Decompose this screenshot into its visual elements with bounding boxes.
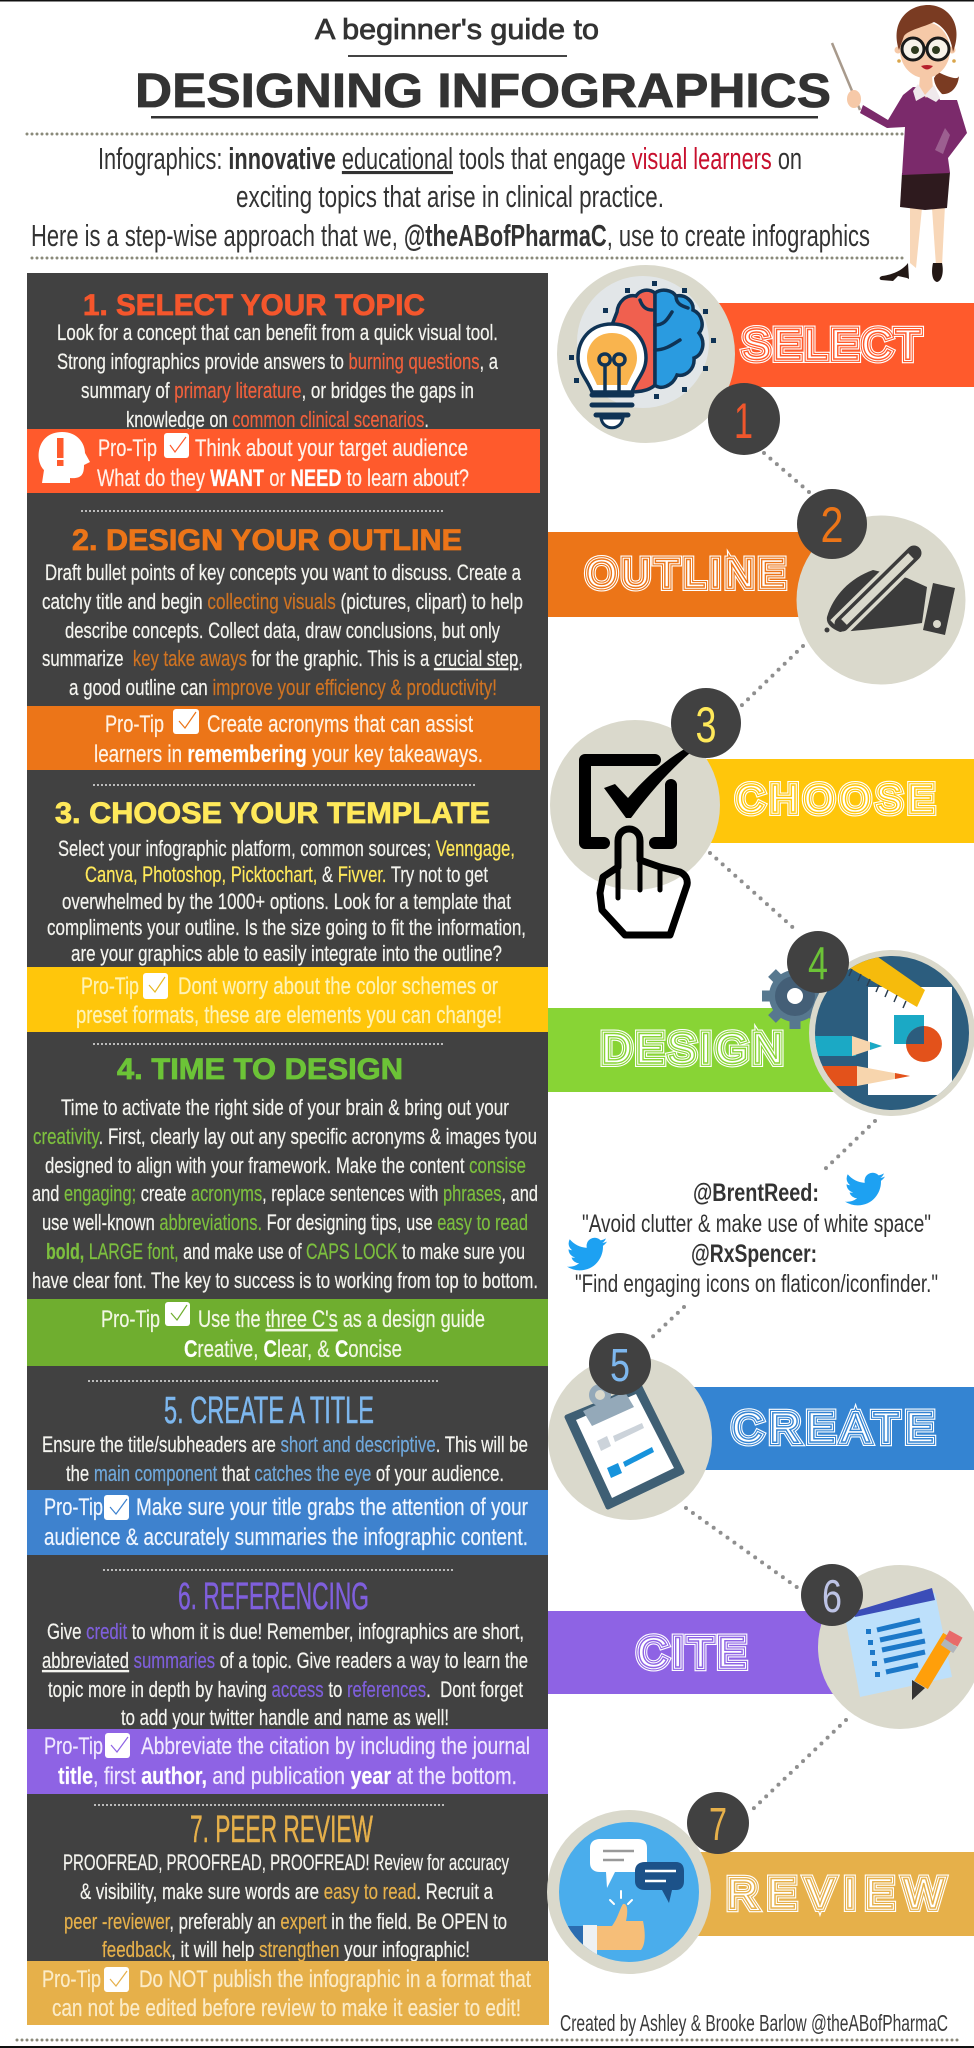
heading: 2. DESIGN YOUR OUTLINE xyxy=(72,524,462,557)
banner: outline: OUTLINE xyxy=(586,552,785,596)
intro text: Infographics: innovative educational tools that engage visual learners on xyxy=(98,141,802,176)
main title: DESIGNING INFOGRAPHICS xyxy=(135,65,831,118)
body text: compliments your outline. Is the size going to fit the information, xyxy=(47,915,526,940)
number badge 2: 2 xyxy=(820,497,844,553)
banner: select xyxy=(700,303,974,387)
quote: RxSpencer: @RxSpencer: xyxy=(691,1240,817,1268)
pro-tip band: Pro-Tip xyxy=(42,1966,101,1993)
intro text: exciting topics that arise in clinical practice. xyxy=(236,179,664,214)
body text: catchy title and begin collecting visuals (pictures, clipart) to help xyxy=(42,589,523,614)
banner: create: CREATE xyxy=(732,1404,934,1452)
body text xyxy=(32,1095,538,1293)
pro-tip band: audience & accurately summaries the infographic content. xyxy=(44,1524,528,1551)
banner: review xyxy=(690,1852,974,1936)
icon: twitter bird xyxy=(567,1238,607,1270)
body text: Strong infographics provide answers to burning questions, a xyxy=(57,349,499,374)
pro-tip band xyxy=(27,1490,548,1555)
banner: design: DESIGN xyxy=(601,1025,783,1073)
expert quotes xyxy=(567,1173,938,1298)
step 6: referencing xyxy=(27,1576,548,1805)
heading: 7. PEER REVIEW xyxy=(190,1809,373,1851)
step 3: choose your template xyxy=(27,797,548,1044)
banner: outline: OUTLINE xyxy=(586,552,785,596)
body text: and engaging; create acronyms, replace sentences with phrases, and xyxy=(32,1181,538,1206)
pro-tip band: Use the three C's as a design guide xyxy=(198,1306,485,1333)
number badge 7 xyxy=(687,1792,749,1854)
body text: Ensure the title/subheaders are short and descriptive. This will be xyxy=(42,1432,528,1457)
banner: cite: CITE xyxy=(637,1629,746,1677)
icon: head with exclamation mark xyxy=(39,432,90,483)
body text xyxy=(42,1432,528,1486)
body text xyxy=(47,836,526,966)
icon: twitter bird xyxy=(845,1173,885,1205)
body text: abbreviated summaries of a topic. Give readers a way to learn the xyxy=(42,1648,528,1673)
body text: to add your twitter handle and name as well! xyxy=(121,1705,449,1730)
banner: design: DESIGN xyxy=(601,1025,783,1073)
pro-tip band: Pro-Tip xyxy=(44,1733,103,1760)
icon: checkbox with pointing hand xyxy=(550,720,720,935)
icon: hand writing with pencil xyxy=(796,516,966,684)
body text: Time to activate the right side of your brain & bring out your xyxy=(61,1095,509,1120)
number badge 1: 1 xyxy=(734,393,753,449)
pro-tip band: What do they WANT or NEED to learn about? xyxy=(97,465,469,492)
pro-tip band: Create acronyms that can assist xyxy=(207,711,473,738)
banner: review: REVIEW xyxy=(727,1870,944,1918)
body text: a good outline can improve your efficiency & productivity! xyxy=(69,675,497,700)
banner: review: REVIEW xyxy=(727,1870,944,1918)
icon: clipboard xyxy=(548,1356,712,1520)
number badge 6 xyxy=(801,1564,863,1626)
heading: 3. CHOOSE YOUR TEMPLATE xyxy=(55,797,490,830)
icon: checkbox xyxy=(104,1495,129,1520)
icon: checkbox xyxy=(104,1967,129,1992)
pro-tip band xyxy=(27,1961,549,2025)
banner: select: SELECT xyxy=(742,321,921,369)
banner: choose xyxy=(690,759,974,843)
body text: feedback, it will help strengthen your infographic! xyxy=(102,1937,470,1962)
body text xyxy=(42,1619,528,1730)
body text: knowledge on common clinical scenarios. xyxy=(126,407,429,432)
banner: choose: CHOOSE xyxy=(736,778,934,821)
pro-tip band: title, first author, and publication year at the bottom. xyxy=(58,1763,517,1790)
pro-tip band: Pro-Tip xyxy=(44,1494,103,1521)
quote: BrentReed xyxy=(582,1179,931,1238)
pro-tip band: Do NOT publish the infographic in a format that xyxy=(139,1966,531,1993)
icon: gear xyxy=(762,963,828,1029)
banner: create: CREATE xyxy=(732,1404,934,1452)
number badge 3: 3 xyxy=(696,697,716,753)
pro-tip band: Pro-Tip xyxy=(81,973,139,1000)
pro-tip band xyxy=(27,429,540,493)
banner: outline: OUTLINE xyxy=(586,552,785,596)
pro-tip band: Creative, Clear, & Concise xyxy=(184,1336,402,1363)
body text: topic more in depth by having access to references. Dont forget xyxy=(48,1677,523,1702)
heading: 5. CREATE A TITLE xyxy=(164,1390,374,1432)
pro-tip band: Think about your target audience xyxy=(195,435,468,462)
body text: peer -reviewer, preferably an expert in the field. Be OPEN to xyxy=(64,1909,507,1934)
banner: cite: CITE xyxy=(637,1629,746,1677)
banner: cite: CITE xyxy=(637,1629,746,1677)
body text: Canva, Photoshop, Picktochart, & Fivver. Try not to get xyxy=(85,862,488,887)
body text: bold, LARGE font, and make use of CAPS LOCK to make sure you xyxy=(46,1239,525,1264)
pro-tip band xyxy=(27,706,540,770)
pro-tip band: preset formats, these are elements you can change! xyxy=(76,1002,502,1029)
number badge 5 xyxy=(589,1333,651,1395)
intro text xyxy=(31,141,870,253)
banner: design: DESIGN xyxy=(601,1025,783,1073)
pro-tip band: Make sure your title grabs the attention of your xyxy=(136,1494,528,1521)
banner: outline: OUTLINE xyxy=(586,552,785,596)
pro-tip band xyxy=(27,967,548,1032)
banner: design xyxy=(548,1008,848,1092)
number badge 4: 4 xyxy=(808,937,828,989)
pro-tip band: can not be edited before review to make it easier to edit! xyxy=(52,1995,521,2022)
body text xyxy=(63,1850,509,1962)
step 5: create a title xyxy=(27,1390,548,1570)
banner: select: SELECT xyxy=(742,321,921,369)
body text: describe concepts. Collect data, draw conclusions, but only xyxy=(65,618,500,643)
icon: speech bubbles and thumbs up xyxy=(547,1810,711,1974)
icon: checkbox xyxy=(164,433,189,458)
body text: Give credit to whom it is due! Remember, infographics are short, xyxy=(47,1619,524,1644)
step 1: select your topic xyxy=(27,289,540,511)
subtitle: A beginner's guide to xyxy=(315,14,599,46)
step 7: peer review xyxy=(27,1809,549,2025)
banner: create: CREATE xyxy=(732,1404,934,1452)
banner: choose: CHOOSE xyxy=(736,778,934,821)
body text: Select your infographic platform, common sources; Venngage, xyxy=(58,836,515,861)
body text: creativity. First, clearly lay out any specific acronyms & images tyou xyxy=(33,1124,537,1149)
body text: have clear font. The key to success is to working from top to bottom. xyxy=(32,1268,538,1293)
pro-tip band: learners in remembering your key takeaways. xyxy=(94,741,483,768)
panel: dark text column xyxy=(27,273,548,2025)
header xyxy=(27,14,905,258)
number badge 5: 5 xyxy=(610,1339,630,1391)
number badge 6: 6 xyxy=(822,1570,842,1622)
banner: cite xyxy=(548,1611,848,1694)
number badge 2 xyxy=(797,489,867,559)
banner: review: REVIEW xyxy=(727,1870,944,1918)
icon: checkbox xyxy=(143,973,168,999)
icon: checkbox xyxy=(105,1733,130,1758)
illustration: teacher with pointer xyxy=(832,5,967,282)
icon: note and pencil xyxy=(818,1565,974,1729)
quote: RxSpencer xyxy=(575,1240,938,1298)
body text: Draft bullet points of key concepts you want to discuss. Create a xyxy=(45,560,522,585)
icon: brain and light bulb xyxy=(557,265,735,443)
body text: summary of primary literature, or bridges the gaps in xyxy=(81,378,474,403)
banner: review: REVIEW xyxy=(727,1870,944,1918)
body text: designed to align with your framework. Make the content consise xyxy=(45,1153,526,1178)
connector dots between steps xyxy=(647,453,875,1810)
pro-tip band xyxy=(27,1729,548,1794)
banner: cite: CITE xyxy=(637,1629,746,1677)
number badge 3 xyxy=(671,688,741,758)
intro text: Here is a step-wise approach that we, @theABofPharmaC, use to create infographics xyxy=(31,218,870,253)
heading: 6. REFERENCING xyxy=(178,1576,369,1618)
pro-tip band: Abbreviate the citation by including the journal xyxy=(141,1733,530,1760)
body text: use well-known abbreviations. For designing tips, use easy to read xyxy=(42,1210,528,1235)
step 2: design your outline xyxy=(27,524,540,785)
body text: & visibility, make sure words are easy to read. Recruit a xyxy=(80,1879,494,1904)
body text: are your graphics able to easily integrate into the outline? xyxy=(71,941,502,966)
pro-tip band: Pro-Tip xyxy=(101,1306,160,1333)
icon: checkbox xyxy=(165,1302,190,1326)
pro-tip band xyxy=(27,1299,548,1366)
number badge 4 xyxy=(787,931,849,993)
icon: design tools and paper xyxy=(809,950,974,1116)
banner: select: SELECT xyxy=(742,321,921,369)
number badge 1 xyxy=(708,383,780,455)
banner: create: CREATE xyxy=(732,1404,934,1452)
body text: PROOFREAD, PROOFREAD, PROOFREAD! Review for accuracy xyxy=(63,1850,509,1875)
pro-tip band: Dont worry about the color schemes or xyxy=(178,973,498,1000)
body text: summarize key take aways for the graphic. This is a crucial step, xyxy=(42,646,523,671)
pro-tip band: Pro-Tip xyxy=(105,711,164,738)
body text xyxy=(57,320,499,432)
pro-tip band: Pro-Tip xyxy=(98,435,157,462)
body text xyxy=(42,560,523,700)
quote: BrentReed: @BrentReed: xyxy=(693,1179,819,1207)
body text: Look for a concept that can benefit from a quick visual tool. xyxy=(57,320,498,345)
banner: select: SELECT xyxy=(742,321,921,369)
body text: overwhelmed by the 1000+ options. Look for a template that xyxy=(62,889,511,914)
icon: checkbox xyxy=(173,709,199,734)
heading: 4. TIME TO DESIGN xyxy=(117,1053,403,1086)
number badge 7: 7 xyxy=(709,1798,727,1850)
banner: outline xyxy=(548,532,818,617)
banner: design: DESIGN xyxy=(601,1025,783,1073)
step 4: time to design xyxy=(27,1053,548,1381)
banner: choose: CHOOSE xyxy=(736,778,934,821)
banner: create xyxy=(690,1387,974,1470)
body text: the main component that catches the eye of your audience. xyxy=(66,1461,504,1486)
banner: choose: CHOOSE xyxy=(736,778,934,821)
heading: 1. SELECT YOUR TOPIC xyxy=(83,289,425,322)
